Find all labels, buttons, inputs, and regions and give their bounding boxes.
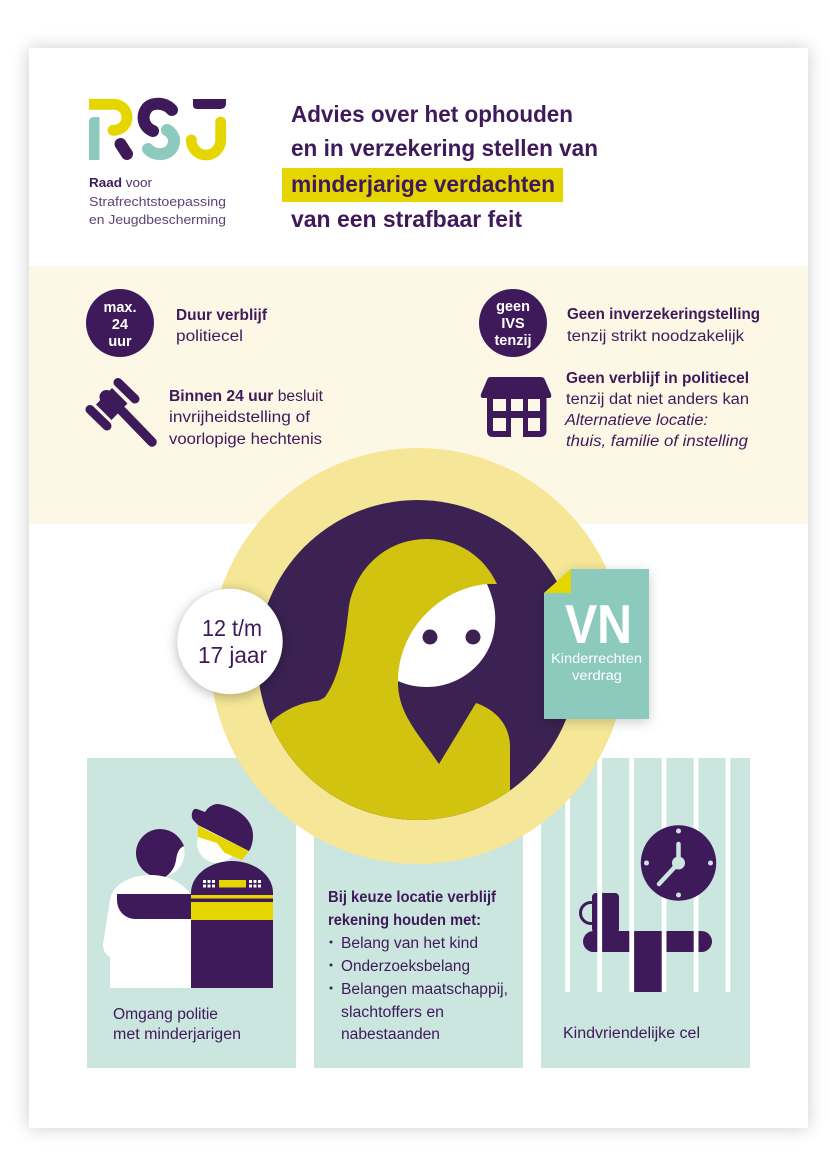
badge: age: 12 t/m [202,615,262,641]
text: kindvriendelijke cel: Kindvriendelijke cel [563,1025,700,1042]
youth head [136,829,184,877]
logo text: en Jeugdbescherming [89,212,226,227]
text: binnen 24 uur: voorlopige hechtenis [169,431,322,448]
badge: max 24 uur: max. [103,300,137,316]
text: keuze locatie verblijf: rekening houden met: [328,912,481,929]
illustration: cell [565,758,730,992]
title: en in verzekering stellen van [291,135,598,161]
text: keuze locatie verblijf: slachtoffers en [341,1004,444,1021]
badge: geen IVS tenzij [479,289,547,357]
icon: gavel [90,382,152,442]
text: duur verblijf: Duur verblijf [176,307,268,324]
text: omgang politie: met minderjarigen [113,1026,241,1043]
bars [565,758,730,992]
logo text [89,175,226,227]
logo text: Strafrechtstoepassing [89,194,226,209]
portrait circle [260,500,566,820]
text: omgang politie: Omgang politie [113,1006,218,1023]
text: keuze locatie verblijf [328,889,508,1043]
icon: mug [580,893,619,933]
logo text: Raad voor [89,175,153,190]
text: geen inverzekeringstelling: Geen inverzekeringstelling [567,306,760,323]
badge: age [177,589,283,697]
panel: left card [87,758,296,1068]
text: binnen 24 uur: Binnen 24 uur besluit [169,388,324,405]
badge: geen IVS tenzij: IVS [501,316,525,332]
title [282,101,598,232]
title: Advies over het ophouden [291,101,573,127]
text: keuze locatie verblijf: Belangen maatschappij, [341,981,508,998]
text: keuze locatie verblijf: Onderzoeksbelang [341,958,470,975]
title: minderjarige verdachten [291,171,555,197]
text: keuze locatie verblijf: Belang van het kind [341,935,478,952]
panel: middle card [314,758,523,1068]
document: VN kinderrechten verdrag [544,569,649,722]
illustration: police officer with youth [103,804,273,988]
text: binnen 24 uur: invrijheidstelling of [169,409,311,426]
officer arm [117,894,191,919]
document: VN kinderrechten verdrag: verdrag [572,668,622,683]
text: geen verblijf in politiecel [564,370,749,450]
icon: house [481,377,551,437]
text: geen inverzekeringstelling [567,306,760,345]
panel: cream band [29,266,808,524]
document: VN kinderrechten verdrag: Kinderrechten [551,651,642,666]
title: van een strafbaar feit [291,206,522,232]
badge: max 24 uur: 24 [112,317,128,333]
face [398,584,495,687]
badge: max 24 uur: uur [108,334,132,350]
text: geen verblijf in politiecel: tenzij dat niet anders kan [566,391,749,408]
officer head [192,804,253,863]
text: geen verblijf in politiecel: thuis, familie of instelling [566,433,748,450]
text: omgang politie [113,1006,241,1043]
text: geen verblijf in politiecel: Alternatieve locatie: [564,412,708,429]
icon: clock [641,825,716,901]
youth body [103,875,191,988]
text: duur verblijf [176,307,268,345]
logo mark [89,99,226,160]
badge: geen IVS tenzij: geen [496,299,530,315]
logo RSJ [89,99,226,227]
eyes [422,630,480,644]
document: VN kinderrechten verdrag: VN [565,593,632,655]
text: keuze locatie verblijf: Bij keuze locatie verblijf [328,889,497,906]
badge: max 24 uur [86,289,154,357]
big yellow ring [210,448,626,864]
icon: table [583,931,712,992]
text: geen verblijf in politiecel: Geen verblijf in politiecel [566,370,749,387]
panel: right card [541,758,750,1068]
text: binnen 24 uur [169,388,324,448]
badge: age: 17 jaar [198,642,267,668]
text: geen inverzekeringstelling: tenzij strikt noodzakelijk [567,328,744,345]
badge: geen IVS tenzij: tenzij [494,333,532,349]
figure: hooded youth [271,539,510,820]
officer body [191,861,273,988]
text: keuze locatie verblijf: nabestaanden [341,1026,440,1043]
text: duur verblijf: politiecel [176,328,243,345]
